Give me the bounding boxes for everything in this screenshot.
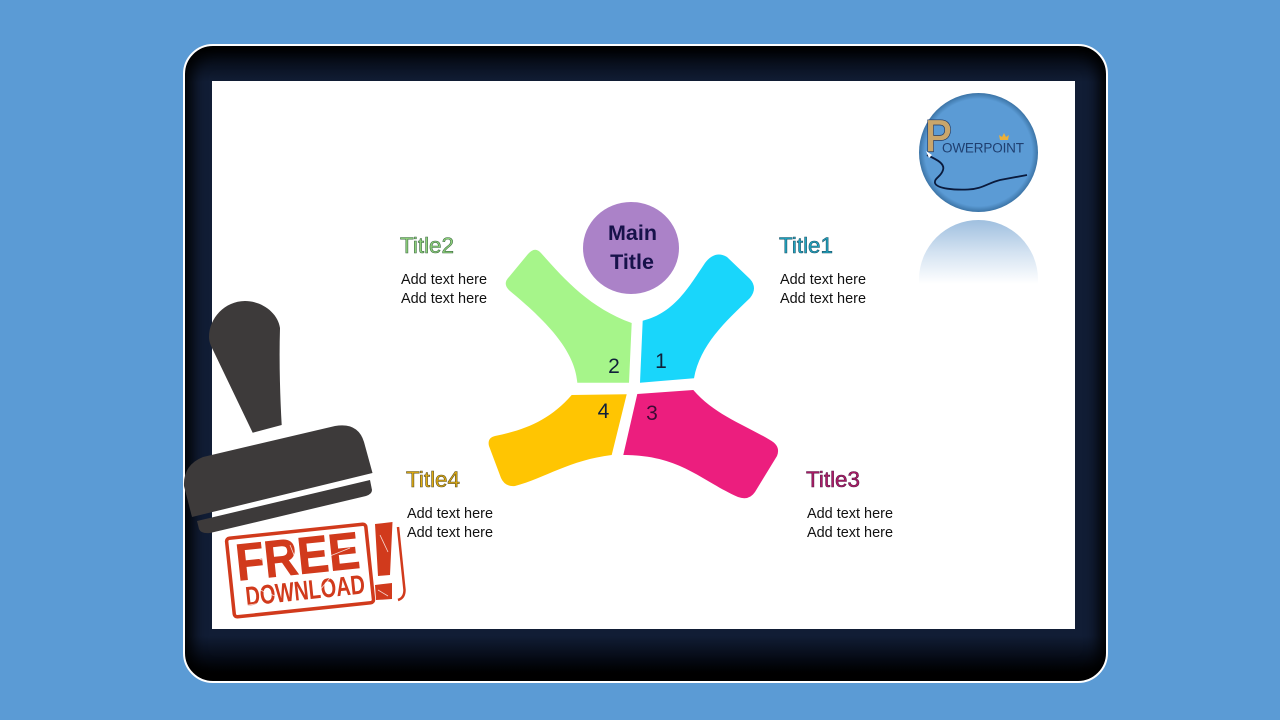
segment 2: green: 2 (608, 355, 620, 378)
logo crown (999, 133, 1009, 140)
segment 3: pink (623, 390, 778, 498)
segment 1: blue: 1 (655, 350, 667, 373)
logo pen line (927, 155, 1027, 190)
text block: Title4: Add text here (407, 525, 493, 541)
white slide (212, 81, 1075, 629)
center circle: Main Title: Title (610, 250, 654, 274)
text block: Title2: Add text here (401, 291, 487, 307)
device frame (183, 44, 1108, 683)
logo wordmark: OWERPOINT (942, 140, 1024, 156)
logo: PowerPoint badge (919, 93, 1038, 212)
text block: Title4 (406, 467, 493, 541)
text block: Title2 (400, 233, 487, 307)
logo reflection (920, 220, 1038, 278)
segment 3: pink: 3 (646, 402, 658, 425)
text block: Title2: Add text here (401, 272, 487, 288)
text block: Title2: Title2 (400, 233, 454, 258)
text block: Title4: Title4 (406, 467, 460, 492)
free download stamp (226, 521, 404, 617)
text block: Title3: Add text here (807, 525, 893, 541)
segment 4: yellow: 4 (598, 400, 610, 423)
text block: Title4: Add text here (407, 506, 493, 522)
text block: Title1: Add text here (780, 291, 866, 307)
exclamation mark (375, 522, 392, 600)
segment 1: blue (640, 255, 754, 383)
text block: Title3 (806, 467, 893, 541)
text block: Title1: Add text here (780, 272, 866, 288)
stamp distress scratches (242, 535, 388, 606)
free download stamp: FREE (233, 522, 362, 592)
center circle: Main Title: Main (608, 221, 657, 245)
logo pen tip (926, 151, 932, 158)
icon: rubber stamp (184, 301, 372, 533)
segment 2: green (506, 250, 632, 383)
text block: Title3: Add text here (807, 506, 893, 522)
free download stamp: DOWNLOAD (244, 569, 366, 612)
center circle: Main Title (583, 202, 679, 294)
text block: Title1: Title1 (779, 233, 833, 258)
text block: Title1 (779, 233, 866, 307)
text block: Title3: Title3 (806, 467, 860, 492)
logo letter P: P (925, 110, 952, 162)
stamp right edge (398, 527, 404, 600)
slide artwork (184, 93, 1038, 618)
segment 4: yellow (489, 394, 627, 486)
